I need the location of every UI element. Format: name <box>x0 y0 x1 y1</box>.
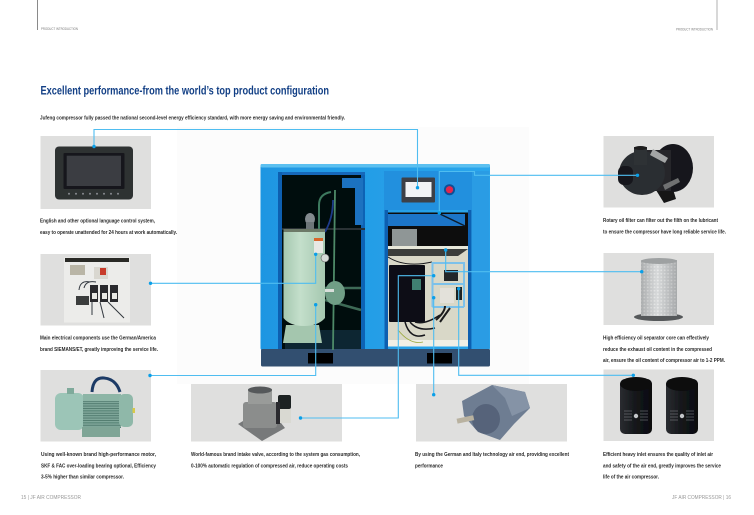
machine base <box>261 349 490 366</box>
caption: oil filter: to ensure the compressor have long reliable service life. <box>603 230 726 236</box>
icon: controller <box>55 146 133 200</box>
caption: intake filters <box>603 452 721 480</box>
caption: oil filter <box>603 218 726 236</box>
footer: right: JF AIR COMPRESSOR | 16 <box>672 495 731 501</box>
icon: electrical cabinet <box>64 258 130 322</box>
icon: separator core <box>634 258 683 321</box>
panel background <box>40 136 151 209</box>
icon: motor <box>55 378 135 437</box>
icon: air end <box>457 385 530 440</box>
caption: control screen: easy to operate unattended for 24 hours at work automatically. <box>40 230 177 236</box>
icon: filter cartridges <box>620 377 698 434</box>
callout: intake filter connector <box>457 287 635 377</box>
callout: separator connector <box>444 248 643 273</box>
panel: oil separator <box>604 253 714 325</box>
callout: valve connector <box>299 274 435 420</box>
caption: oil separator: reduce the exhaust oil content in the compressed <box>603 347 712 353</box>
caption: intake filters: life of the air compressor. <box>603 474 659 480</box>
caption: intake valve: World-famous brand intake valve, according to the system gas consumption, <box>191 452 360 458</box>
caption: control screen <box>40 218 177 236</box>
panel background <box>604 370 714 441</box>
panel background <box>604 253 714 325</box>
right door frame <box>472 171 490 349</box>
page header: right: PRODUCT INTRODUCTION <box>676 28 713 32</box>
panel background <box>40 370 151 442</box>
caption: oil separator: High efficiency oil separator core can effectively <box>603 336 710 342</box>
caption: intake filters: Efficient heavy inlet ensures the quality of inlet air <box>603 452 714 458</box>
callout: air end connector <box>432 296 435 396</box>
callout: control screen connector <box>92 130 419 189</box>
panel background <box>40 254 151 326</box>
page header: left: PRODUCT INTRODUCTION <box>41 27 78 31</box>
right compartment <box>384 210 472 349</box>
left compartment <box>278 172 365 350</box>
panel: motor <box>40 370 151 442</box>
page header: left <box>37 0 78 31</box>
footer: left: 15 | JF AIR COMPRESSOR <box>21 495 81 501</box>
callout: oil filter connector <box>438 172 639 215</box>
panel: control screen <box>40 136 151 209</box>
caption: electrical components: Main electrical components use the German/America <box>40 336 157 342</box>
intro text: Jufeng compressor fully passed the national second-level energy efficiency standard, with more energy saving and environmental friendly. <box>40 116 345 122</box>
compressor machine <box>260 164 490 366</box>
panel: oil filter <box>604 136 714 208</box>
caption: air end: By using the German and Italy technology air end, providing excellent <box>415 452 569 458</box>
caption: oil separator: air, ensure the oil content of compressor air to 1-2 PPM. <box>603 358 725 364</box>
panel: intake filters <box>604 370 714 441</box>
panel: air end <box>416 384 567 442</box>
air tank <box>283 229 334 343</box>
caption: electrical components <box>40 336 158 353</box>
caption: motor: Using well-known brand high-performance motor, <box>41 452 156 458</box>
icon: rotary filter <box>618 144 693 203</box>
page header: right <box>676 0 718 32</box>
caption: motor: SKF & FAC over-loading bearing optional, Efficiency <box>41 464 157 470</box>
inverter <box>389 265 440 342</box>
callout: motor connector <box>148 303 317 377</box>
caption: intake valve <box>191 452 360 470</box>
caption: control screen: English and other optional language control system, <box>40 218 155 224</box>
caption: motor <box>41 452 157 480</box>
caption: electrical components: brand SIEMANS/ET, greatly improving the service life. <box>40 347 158 353</box>
panel background <box>604 136 714 208</box>
icon: valve <box>238 386 291 441</box>
caption: oil separator <box>603 336 725 364</box>
electrical bracket <box>432 262 464 322</box>
title: Excellent performance-from the world’s top product configuration <box>40 86 329 98</box>
callout: electrical connector <box>149 253 317 285</box>
panel: intake valve <box>191 384 342 442</box>
panel: electrical components <box>40 254 151 326</box>
caption: motor: 3-5% higher than similar compressor. <box>41 474 124 480</box>
product backdrop <box>177 127 529 384</box>
cabinet body <box>260 164 490 350</box>
control panel <box>384 171 474 210</box>
caption: air end: performance <box>415 464 443 470</box>
caption: intake valve: 0-100% automatic regulation of compressed air, reduce operating costs <box>191 464 348 470</box>
panel background <box>416 384 567 442</box>
caption: intake filters: and safety of the air end, greatly improves the service <box>603 464 721 470</box>
caption: air end <box>415 452 569 470</box>
panel background <box>191 384 342 442</box>
caption: oil filter: Rotary oil filter can filter out the filth on the lubricant <box>603 218 718 224</box>
